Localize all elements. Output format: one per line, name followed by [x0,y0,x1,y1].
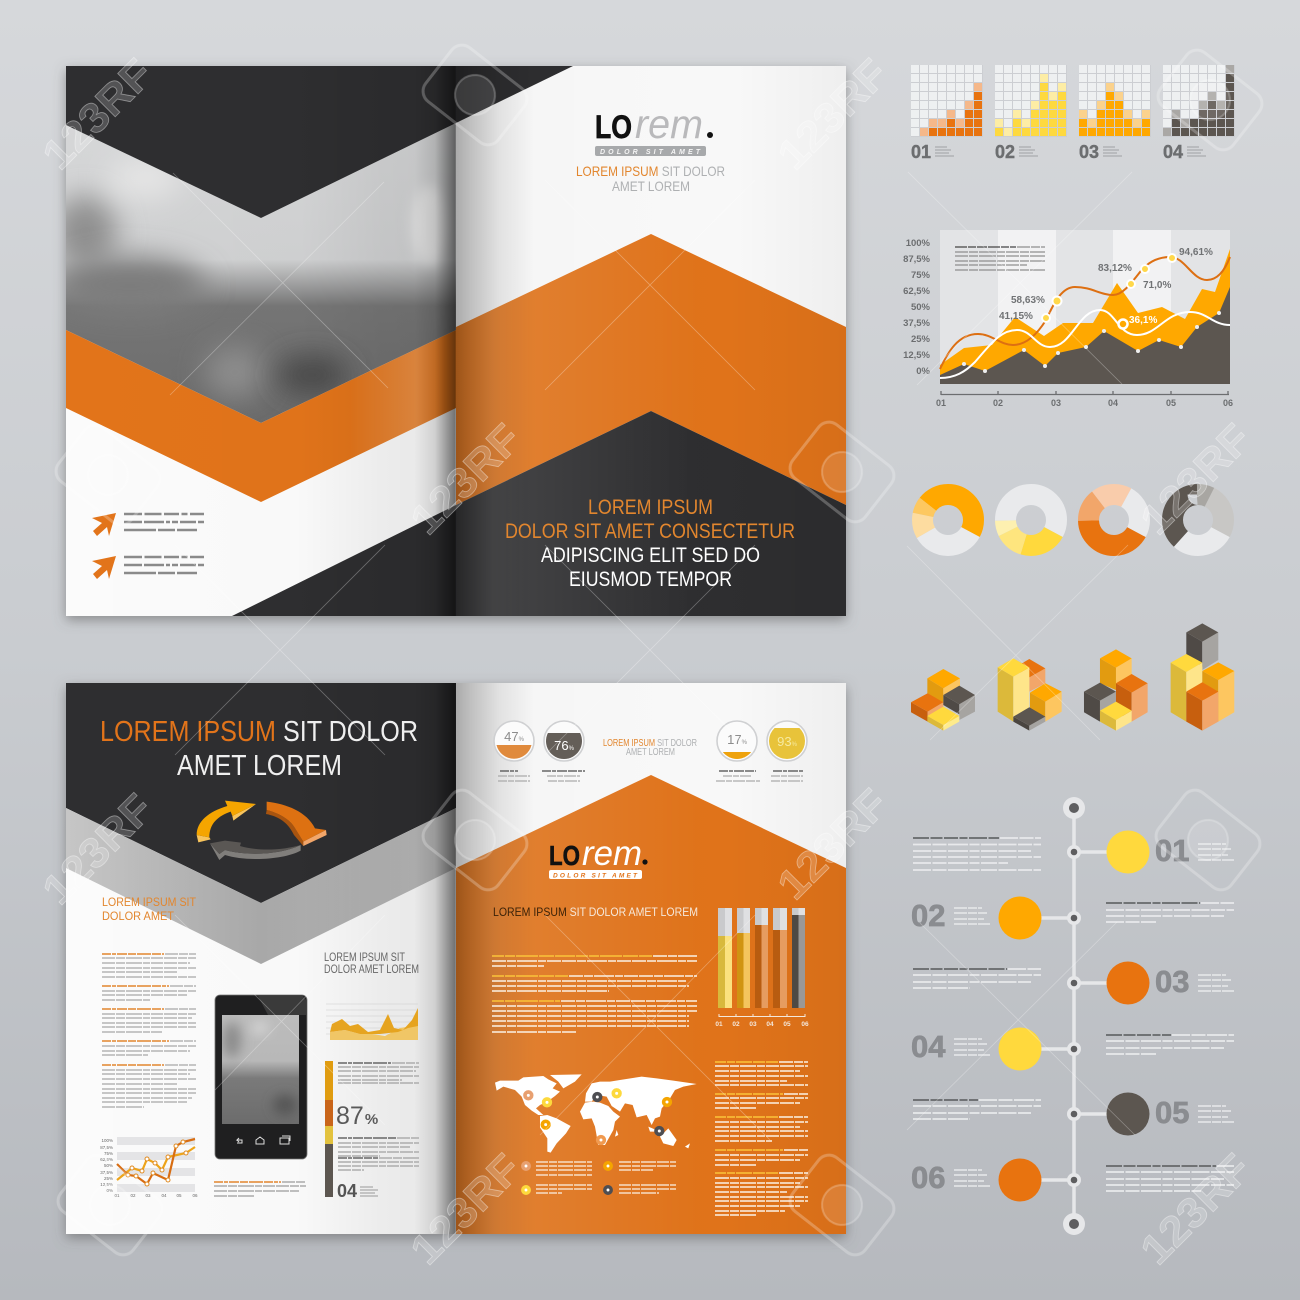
watermark text: 123RF [33,785,162,913]
line chart small: 25% [104,1176,113,1181]
timeline [911,797,1234,1235]
line chart small: 02 [130,1193,136,1198]
chart y labels: 25% [911,334,931,345]
map: world [495,1074,697,1153]
subtitle top logo: LOREM IPSUM SIT DOLOR [576,163,725,179]
panel: bottom brochure spread [66,683,846,1234]
watermark text: 123RF [401,415,530,543]
blurred photo chevron [53,120,456,430]
bar chart on orange: 05 [783,1021,791,1028]
logo top [595,101,713,156]
watermark text: 123RF [1131,415,1260,543]
chart x axis [941,391,1229,395]
chart y labels: 75% [911,270,931,281]
logo on orange: DOLOR SIT AMET [553,872,638,880]
chart y labels: 100% [906,238,931,249]
dark chevron right page [456,411,846,616]
line chart small: 03 [145,1193,151,1198]
logo on orange [549,834,648,880]
subheading: orange [102,895,197,923]
text below phone [214,1182,306,1196]
icon: orange arrow 2 [92,556,116,579]
chart value labels [999,247,1213,326]
subheading: gray: DOLOR AMET LOREM [324,964,419,976]
timeline numbers: 01 [1155,833,1189,868]
chart x labels: 02 [993,398,1003,408]
timeline circles [998,830,1150,1202]
chart x labels: 05 [1166,398,1176,408]
chart value labels: 41,15% [999,311,1033,322]
chart: area chart [903,230,1233,408]
timeline nodes [1067,845,1081,1187]
bar 5 [792,908,805,1008]
gauge 47 [494,721,534,761]
subheading: gray [324,952,419,976]
label: 04: 04 [337,1181,357,1201]
line chart small: 0% [106,1188,113,1193]
line chart small: 87,5% [100,1145,113,1150]
chart: pixel grid 04: 04 [1163,142,1183,162]
bar 2 [737,908,750,1008]
heading: dark panel text: LOREM IPSUM [588,496,713,519]
chart value labels: 58,63% [1011,295,1045,306]
watermark text: 123RF [401,1145,530,1273]
chart: pixel grid 03 [1079,65,1151,162]
text column right on orange [715,1062,808,1215]
white curve [940,310,1230,378]
chart: pixel grid 03: 03 [1079,142,1099,162]
chart y labels: 62,5% [903,286,931,297]
chart x labels: 06 [1223,398,1233,408]
chart: pixel grid 04 [1163,65,1235,162]
dark area points [962,311,1221,373]
text block: left page lines 1 [124,514,206,530]
text column on orange [492,956,697,1032]
heading: left page [100,716,418,782]
gauge 76: 76% [554,738,575,753]
line chart small: 06 [192,1193,198,1198]
icon: isometric blocks 2 [998,658,1062,731]
line chart small: 62,5% [100,1157,113,1162]
watermark text: 123RF [768,50,897,178]
bar chart on orange: 06 [801,1021,809,1028]
text block stacked 1 [338,1063,419,1170]
chart value labels: 83,12% [1098,263,1132,274]
chart: donut 1 [922,494,974,546]
stat: 87 percent: 87% [336,1102,378,1130]
gauge 93: 93% [777,734,798,749]
bar 4 [773,908,787,1008]
gauges title: LOREM IPSUM SIT DOLOR [603,737,697,749]
bottom spread gutter shading [66,683,846,1234]
dark area [940,287,1230,384]
bar chart on orange: 01 [715,1021,723,1028]
timeline spine [1072,808,1076,1224]
chart x labels: 01 [936,398,946,408]
chart text block [955,247,1045,270]
logo top: rem [635,101,703,147]
logo on orange: LO [549,840,580,871]
bar 3 [755,908,768,1008]
chart x labels [936,398,1233,408]
subtitle top logo [576,163,725,194]
subheading: gray: LOREM IPSUM SIT [324,952,405,964]
timeline numbers: 03 [1155,964,1189,999]
gauge 17: 17% [727,732,748,747]
subtitle top logo: AMET LOREM [612,178,690,194]
orange curve [940,257,1230,369]
timeline numbers [911,833,1189,1195]
heading: left page: AMET LOREM [177,750,342,782]
chart: pixel grid 01: 01 [911,142,931,162]
phone [215,995,307,1159]
orange chevron right page [456,234,846,505]
highlight on left orange band [66,330,456,502]
icon: isometric blocks 1 [911,669,975,731]
top spread gutter shading [66,66,846,616]
orange house panel [456,775,846,1234]
timeline numbers: 02 [911,898,945,933]
chart: donut 2 [1006,494,1056,546]
text column left [102,954,196,1107]
chart x labels: 03 [1051,398,1061,408]
dark chevron top left [66,66,573,218]
line chart small [100,1137,198,1198]
line chart small: 01 [114,1193,120,1198]
timeline number captions [954,844,1234,1186]
timeline text heads [913,838,1216,1166]
heading: left page: LOREM IPSUM SIT DOLOR [100,716,418,748]
gauges row [494,721,807,781]
chart value labels: 71,0% [1143,280,1171,291]
icon: isometric blocks 3 [1084,649,1148,731]
gray chevron [66,808,456,964]
subheading: orange: DOLOR AMET [102,909,175,923]
heading: dark panel text: EIUSMOD TEMPOR [569,568,732,591]
mini area chart [326,1004,418,1040]
map legend [523,1162,676,1193]
chart y labels: 12,5% [903,350,931,361]
watermark text: 123RF [33,50,162,178]
highlight on top right page colour panels [456,234,846,616]
watermark lines [170,172,1135,1140]
gauge 93 [767,721,807,761]
heading on orange: LOREM IPSUM SIT DOLOR AMET LOREM [493,905,698,919]
bar chart on orange [715,908,809,1028]
bar chart on orange: 03 [749,1021,757,1028]
timeline text lines [913,838,1234,1191]
label: 04 [337,1181,378,1201]
orange band left page [66,330,456,502]
bar axis [719,1014,805,1017]
text block: left page lines 2 [124,557,206,573]
timeline numbers: 06 [911,1160,945,1195]
icon: isometric blocks 4 [1171,623,1234,731]
gauge 47: 47% [504,729,525,744]
chart value labels: 36,1% [1129,315,1157,326]
watermark text: 123RF [1131,1145,1260,1273]
chart: pixel grid 01 [911,65,983,162]
chart: donut 4 [1172,494,1224,546]
gauge captions [500,770,803,772]
chart bands [940,230,1230,384]
logo on orange: rem [582,834,642,873]
dark wedge left page [232,505,456,616]
chart value labels: 94,61% [1179,247,1213,258]
chart: donut 3 [1088,494,1140,546]
bar chart on orange: 04 [766,1021,774,1028]
logo top: DOLOR SIT AMET [600,149,701,156]
chart: pixel grid 02 [995,65,1067,162]
timeline end caps [1063,797,1085,1235]
heading: dark panel text: DOLOR SIT AMET CONSECTETUR [505,520,795,543]
line chart small: 04 [161,1193,167,1198]
heading: dark panel text: ADIPISCING ELIT SED DO [541,544,760,567]
heading: dark panel text [505,496,795,591]
chart markers [1042,254,1176,328]
line chart small: 12,5% [100,1182,113,1187]
chart: pixel grid 02: 02 [995,142,1015,162]
line chart small: 100% [101,1138,113,1143]
line chart small: 05 [176,1193,182,1198]
panel: top brochure spread [53,66,846,616]
dark header left page [66,683,456,903]
chart x labels: 04 [1108,398,1118,408]
line chart small: 50% [104,1163,113,1168]
timeline numbers: 05 [1155,1095,1189,1130]
stacked bar [325,1061,333,1197]
timeline connectors [1038,852,1110,1180]
gauge 17 [717,721,757,761]
highlight on orange house panel [456,775,846,1234]
line chart small: 37,5% [100,1170,113,1175]
bar chart on orange: 02 [732,1021,740,1028]
icon: orange arrow 1 [92,513,116,536]
map markers [525,1090,670,1143]
timeline numbers: 04 [911,1029,946,1064]
watermark text: 123RF [768,780,897,908]
gauges title [603,737,697,758]
logo top: LO [595,109,632,145]
chart y labels: 37,5% [903,318,931,329]
chart y labels: 50% [911,302,931,313]
gauges title: AMET LOREM [626,746,675,758]
chart y labels: 87,5% [903,254,931,265]
chart y labels [903,238,931,377]
subheading: orange: LOREM IPSUM SIT [102,895,197,909]
chart y labels: 0% [916,366,931,377]
gauge 76 [544,721,584,761]
bar 1 [718,908,732,1008]
line chart small: 75% [104,1151,113,1156]
icon: cycle arrows [197,801,327,860]
orange area [940,249,1230,384]
